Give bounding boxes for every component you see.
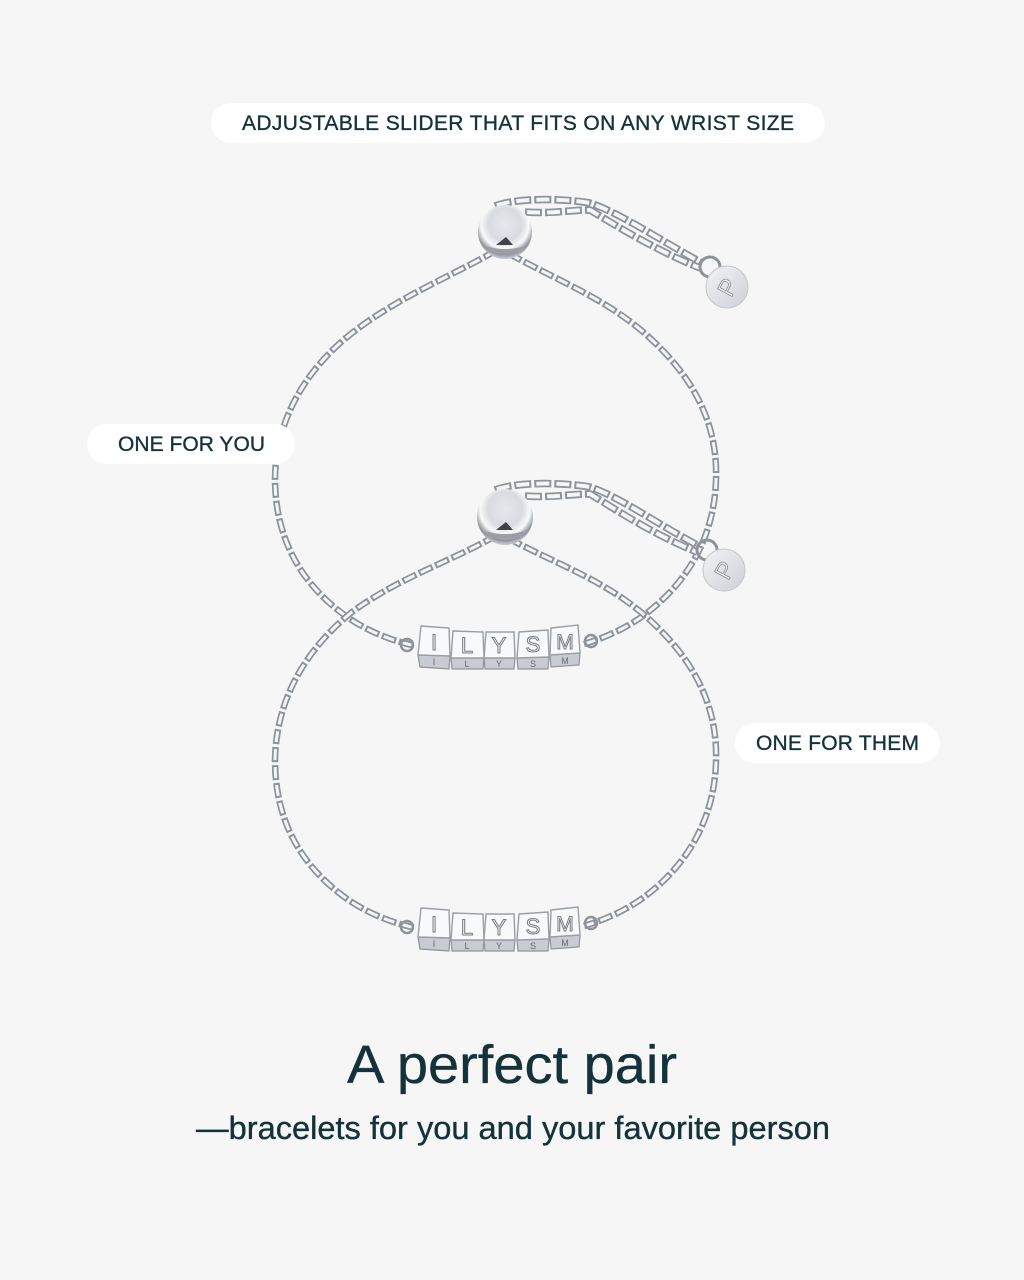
callout: one for them bbox=[735, 723, 940, 763]
top bracelet chain bbox=[275, 250, 716, 646]
top bracelet ILYSM beads: M bbox=[556, 631, 574, 654]
top bracelet ILYSM beads: I bbox=[431, 630, 437, 655]
title: A perfect pair bbox=[347, 1035, 677, 1095]
top bracelet ILYSM beads: L bbox=[461, 633, 473, 658]
top bracelet slider bead bbox=[478, 205, 532, 259]
top bracelet ILYSM beads: Y bbox=[492, 633, 507, 658]
top bracelet ILYSM beads: S bbox=[526, 632, 540, 657]
bottom bracelet ILYSM beads: M bbox=[561, 938, 569, 948]
bottom bracelet ILYSM beads bbox=[401, 907, 597, 951]
bottom bracelet ILYSM beads: I bbox=[433, 939, 435, 949]
top bracelet ILYSM beads bbox=[401, 625, 597, 669]
bottom bracelet ILYSM beads: S bbox=[526, 914, 540, 939]
top bracelet ring and charm: P bbox=[713, 274, 744, 301]
bottom bracelet slider bead bbox=[477, 489, 533, 545]
bottom bracelet chain bbox=[275, 535, 716, 928]
callout: one for you bbox=[87, 424, 295, 464]
bottom bracelet ring and charm: P bbox=[710, 557, 741, 584]
callout: one for them: ONE FOR THEM bbox=[756, 732, 919, 755]
bracelet: bottom (one for them) bbox=[275, 484, 745, 951]
bottom bracelet ring and charm bbox=[697, 540, 745, 591]
callout: adjustable slider bbox=[211, 103, 825, 143]
subtitle: —bracelets for you and your favorite person bbox=[196, 1110, 830, 1146]
bottom bracelet ILYSM beads: L bbox=[464, 941, 470, 951]
bottom bracelet ILYSM beads: Y bbox=[492, 915, 507, 940]
bottom bracelet ILYSM beads: Y bbox=[496, 941, 502, 951]
top bracelet ILYSM beads: L bbox=[464, 659, 470, 669]
bottom bracelet ILYSM beads: M bbox=[556, 913, 574, 936]
top bracelet ILYSM beads: Y bbox=[496, 659, 502, 669]
top bracelet slider extension chain bbox=[495, 200, 702, 268]
callout: adjustable slider: ADJUSTABLE SLIDER THAT FITS ON ANY WRIST SIZE bbox=[242, 112, 794, 135]
bracelet: top (one for you) bbox=[275, 200, 748, 669]
bottom bracelet ILYSM beads: L bbox=[461, 915, 473, 940]
top bracelet ILYSM beads: I bbox=[433, 657, 435, 667]
bottom bracelet ILYSM beads: I bbox=[431, 912, 437, 937]
bottom bracelet slider extension chain bbox=[495, 484, 699, 552]
callout: one for you: ONE FOR YOU bbox=[118, 433, 265, 456]
bottom bracelet ILYSM beads: S bbox=[530, 941, 536, 951]
top bracelet ILYSM beads: S bbox=[530, 659, 536, 669]
top bracelet ring and charm bbox=[700, 257, 748, 308]
top bracelet ILYSM beads: M bbox=[561, 656, 569, 666]
